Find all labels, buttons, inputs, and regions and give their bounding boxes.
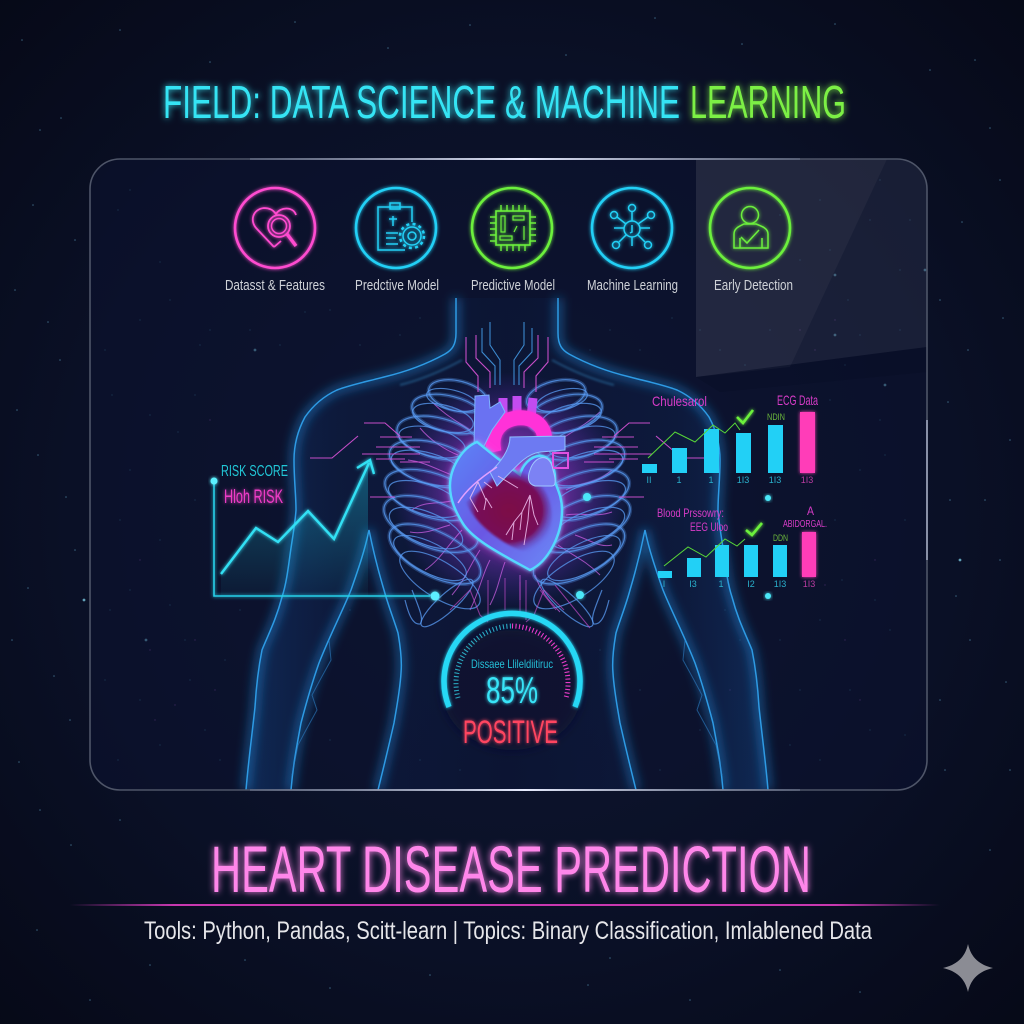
icon: four-point sparkle — [943, 944, 993, 992]
pink vessel box — [553, 453, 568, 468]
icon labels: Datasst & Features — [225, 277, 325, 294]
icon labels — [226, 279, 792, 293]
gauge value: 85% — [486, 670, 538, 711]
bar chart: blood pressure: 1I3 — [774, 579, 786, 589]
high risk label: Hloh RISK — [224, 487, 283, 508]
bar chart: blood pressure: Blood Prssowry: — [657, 506, 724, 520]
bar chart: cholesterol and ECG: Chulesarol — [652, 393, 707, 409]
title: field: FIELD: DATA SCIENCE & MACHINE — [163, 76, 680, 128]
rib cage — [376, 374, 638, 632]
icon: heart with magnifier — [235, 188, 315, 268]
bar chart: blood pressure: 1I3 — [803, 579, 815, 589]
bar chart: cholesterol and ECG: 1 — [676, 475, 682, 485]
icon: clipboard and gear — [356, 188, 436, 268]
heart outer glow — [450, 442, 562, 570]
stroke glow — [376, 374, 491, 596]
bar chart: cholesterol and ECG: NDIN — [767, 412, 785, 422]
icon: neural network — [592, 188, 672, 268]
right atrium — [528, 458, 555, 486]
step icons row — [225, 188, 793, 294]
gauge — [442, 613, 582, 750]
title: field: LEARNING — [690, 76, 846, 128]
bar chart: cholesterol and ECG: II — [646, 475, 652, 485]
bar chart: blood pressure: I2 — [747, 579, 755, 589]
panel: glass card — [90, 159, 927, 790]
positive result: POSITIVE — [463, 714, 558, 750]
risk score label: RISK SCORE — [221, 463, 288, 480]
neck and side circuits — [310, 322, 704, 628]
bar chart: cholesterol and ECG: 1 — [708, 475, 714, 485]
bar chart: blood pressure — [576, 504, 827, 599]
subtitle: tools and topics: Tools: Python, Pandas, Scitt-learn | Topics: Binary Classification, Imlablened Data — [144, 917, 872, 945]
bar chart: blood pressure: I3 — [689, 579, 697, 589]
aorta arch — [493, 396, 544, 452]
bar chart: cholesterol and ECG: 1I3 — [737, 475, 749, 485]
bar chart: cholesterol and ECG: ECG Data — [777, 392, 818, 408]
icon: microchip — [472, 188, 552, 268]
vena cava — [474, 395, 505, 448]
human torso — [246, 298, 768, 790]
icon labels: Predctive Model — [355, 277, 439, 294]
heart glow — [392, 372, 628, 608]
heart body — [450, 442, 562, 570]
bar chart: cholesterol and ECG: 1I3 — [769, 475, 781, 485]
bar chart: blood pressure: A — [807, 504, 814, 518]
coronary veins — [470, 476, 538, 545]
pulmonary trunk — [490, 436, 565, 486]
icon labels: Early Detection — [714, 277, 793, 294]
bar chart: cholesterol and ECG: 1I3 — [801, 475, 813, 485]
bar chart: blood pressure: 1 — [718, 579, 724, 589]
bar chart: blood pressure: ABIDORGAL. — [783, 518, 827, 530]
icon: person with check — [710, 188, 790, 268]
bar chart: blood pressure: I — [663, 579, 665, 589]
bar chart: cholesterol and ECG — [583, 392, 818, 501]
bar chart: blood pressure: EEG Uloo — [690, 520, 728, 534]
dark ventricle — [466, 470, 552, 551]
icon labels: Predictive Model — [471, 277, 555, 294]
bar chart: blood pressure: DDN — [773, 533, 788, 543]
divider rule — [70, 904, 940, 906]
gauge caption: Dissaee Llileldiitiruc — [471, 657, 553, 671]
heart — [450, 395, 568, 570]
icon labels: Machine Learning — [587, 277, 678, 294]
risk score chart — [210, 460, 440, 600]
atrium seam — [458, 467, 497, 503]
glass reflection — [696, 159, 927, 392]
